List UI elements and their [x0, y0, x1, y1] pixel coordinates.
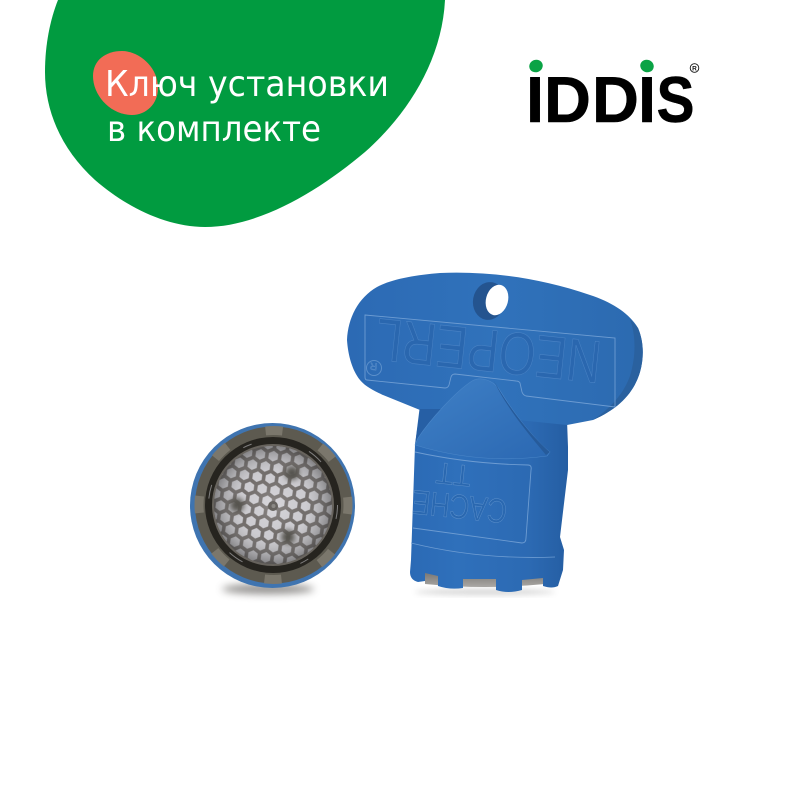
- key shadow: [415, 572, 555, 595]
- key embossed label: TT: [434, 455, 473, 492]
- key lower bands: [411, 543, 555, 557]
- registered mark: R: [692, 66, 697, 72]
- key hole: [470, 280, 512, 322]
- logo: IDDIS: S: [656, 63, 694, 136]
- aerator blue outer rim: [190, 423, 355, 588]
- key head: [347, 273, 643, 425]
- key cone: [415, 379, 550, 459]
- logo: IDDIS: D: [544, 63, 591, 136]
- key embossed brand: NEOPERL: [373, 305, 604, 396]
- key: [347, 273, 643, 595]
- aerator shadow: [222, 584, 314, 594]
- logo green dots: [527, 58, 656, 74]
- logo: IDDIS: I: [526, 63, 544, 136]
- heading text: Ключ установки: [105, 64, 389, 105]
- key stem: [410, 405, 568, 592]
- key label frame: [413, 452, 531, 543]
- key registered mark: R: [369, 360, 378, 371]
- key embossed label: CACHE: [410, 482, 509, 530]
- heading text: [105, 64, 389, 150]
- coral accent blob: [93, 51, 158, 115]
- panel: green headline blob: [45, 0, 445, 227]
- key embossed frame: [365, 315, 615, 407]
- registered mark: [690, 64, 699, 72]
- key registered mark: [366, 360, 382, 376]
- aerator: [190, 423, 355, 594]
- heading text: в комплекте: [107, 109, 321, 150]
- aerator mesh dark spots: [230, 466, 299, 544]
- logo: IDDIS: I: [638, 63, 656, 136]
- aerator mesh: [212, 444, 334, 566]
- logo: IDDIS: D: [592, 63, 639, 136]
- key neck shade: [415, 409, 444, 445]
- aerator centre hub: [268, 501, 278, 511]
- aerator olive ring: [195, 426, 352, 584]
- key embossed label: [410, 455, 509, 530]
- aerator dark inner ring: [205, 437, 341, 573]
- logo: IDDIS: [526, 58, 699, 136]
